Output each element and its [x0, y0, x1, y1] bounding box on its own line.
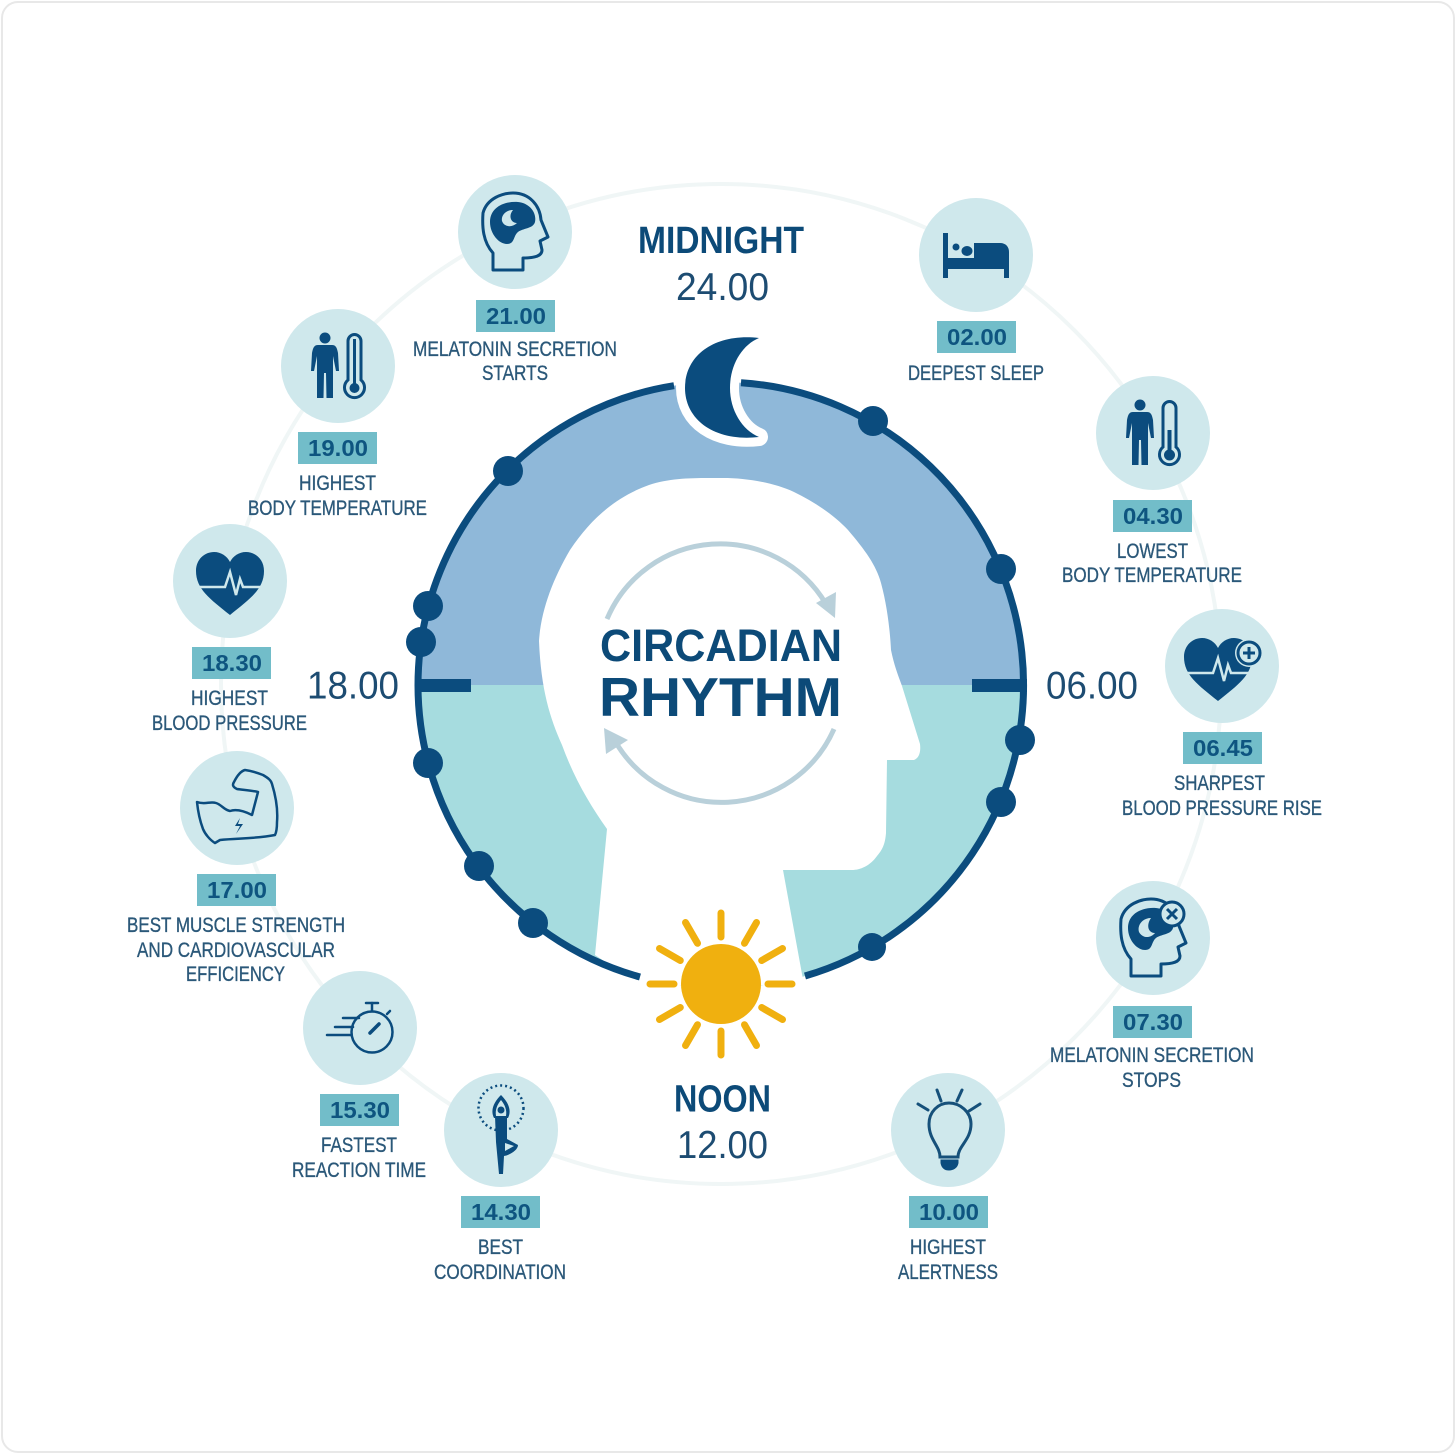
item: 18.30 highest blood pressure: BLOOD PRESSURE	[152, 712, 307, 735]
item: 04.30 lowest temperature: LOWEST	[1117, 540, 1188, 563]
icon: person and low thermometer	[1126, 400, 1180, 465]
cycle arrow: bottom	[604, 728, 834, 802]
icon: flexed arm	[197, 770, 277, 843]
item: 07.30 melatonin stops	[1050, 881, 1254, 1092]
item: 17.00 muscle strength: 17.00	[207, 877, 267, 903]
18.00 tick	[416, 679, 471, 692]
label: 18.00: 18.00	[307, 664, 399, 708]
item: 17.00 muscle strength: BEST MUSCLE STRENGTH	[127, 914, 345, 937]
item: 02.00 deepest sleep	[908, 198, 1044, 385]
title: circadian rhythm: CIRCADIAN	[600, 620, 842, 671]
item: 19.00 highest temperature: 19.00	[308, 435, 368, 461]
title: circadian rhythm	[599, 620, 842, 728]
heading: midnight: MIDNIGHT	[638, 220, 804, 262]
item: 19.00 highest temperature: BODY TEMPERATURE	[248, 497, 427, 520]
heading: midnight	[638, 220, 804, 309]
item: 17.00 muscle strength	[127, 751, 345, 986]
item: 06.45 sharpest blood pressure rise: BLOOD PRESSURE RISE	[1122, 797, 1322, 820]
item: 10.00 alertness: 10.00	[919, 1199, 979, 1225]
ring outline	[418, 383, 1024, 977]
central clock dial	[406, 375, 1035, 995]
icon: stopwatch	[327, 1003, 392, 1052]
item: 07.30 melatonin stops: MELATONIN SECRETION	[1050, 1044, 1254, 1067]
event dots on ring	[406, 406, 1035, 961]
cycle arrow: top	[607, 544, 836, 619]
item: 10.00 alertness: HIGHEST	[910, 1236, 986, 1259]
item: 21.00 melatonin starts: MELATONIN SECRETION	[413, 338, 617, 361]
night half of dial	[410, 375, 1032, 685]
item: 18.30 highest blood pressure: 18.30	[202, 650, 262, 676]
icon: sun	[650, 913, 792, 1055]
item: 19.00 highest temperature: HIGHEST	[299, 472, 376, 495]
icon: person and full thermometer	[311, 332, 364, 398]
item: 02.00 deepest sleep: DEEPEST SLEEP	[908, 362, 1044, 385]
item: 15.30 reaction time: 15.30	[330, 1097, 390, 1123]
item: 04.30 lowest temperature: 04.30	[1123, 503, 1183, 529]
icon: yoga tree pose	[478, 1086, 524, 1174]
item: 17.00 muscle strength: AND CARDIOVASCULAR	[137, 939, 335, 962]
item: 19.00 highest temperature	[248, 309, 427, 520]
item: 15.30 reaction time: REACTION TIME	[292, 1159, 426, 1182]
item: 10.00 alertness	[891, 1073, 1005, 1284]
heading: noon	[674, 1078, 771, 1167]
item: 07.30 melatonin stops: STOPS	[1122, 1069, 1181, 1092]
item: 07.30 melatonin stops: 07.30	[1123, 1009, 1183, 1035]
item: 21.00 melatonin starts: 21.00	[486, 303, 546, 329]
heading: noon: 12.00	[677, 1124, 768, 1167]
item: 06.45 sharpest blood pressure rise: 06.45	[1193, 735, 1253, 761]
icon: heart with plus	[1184, 638, 1263, 701]
title: circadian rhythm: RHYTHM	[599, 666, 842, 728]
item: 21.00 melatonin starts	[413, 175, 617, 385]
item: 14.30 coordination: 14.30	[471, 1199, 531, 1225]
head silhouette	[539, 478, 920, 985]
item: 14.30 coordination: BEST	[478, 1236, 523, 1259]
item: 06.45 sharpest blood pressure rise	[1122, 609, 1322, 820]
icon: head with moon brain	[483, 193, 548, 270]
item: 21.00 melatonin starts: STARTS	[482, 362, 548, 385]
item: 15.30 reaction time: FASTEST	[321, 1134, 397, 1157]
item: 14.30 coordination: COORDINATION	[434, 1261, 566, 1284]
item: 18.30 highest blood pressure	[152, 524, 307, 735]
icon: heart with pulse	[196, 552, 264, 615]
item: 04.30 lowest temperature: BODY TEMPERATURE	[1062, 564, 1242, 587]
item: 17.00 muscle strength: EFFICIENCY	[186, 963, 285, 986]
item: 04.30 lowest temperature	[1062, 376, 1242, 587]
item: 15.30 reaction time	[292, 971, 426, 1182]
icon: light bulb	[918, 1090, 980, 1170]
icon: bed	[943, 233, 1009, 278]
item: 18.30 highest blood pressure: HIGHEST	[191, 687, 268, 710]
item: 06.45 sharpest blood pressure rise: SHARPEST	[1174, 772, 1265, 795]
06.00 tick	[972, 679, 1027, 692]
day half of dial	[410, 685, 1032, 995]
icon: moon	[685, 337, 759, 438]
icon: head with crossed moon	[1121, 899, 1186, 976]
item: 02.00 deepest sleep: 02.00	[947, 324, 1007, 350]
item: 10.00 alertness: ALERTNESS	[898, 1261, 998, 1284]
heading: noon: NOON	[674, 1078, 771, 1120]
label: 06.00: 06.00	[1046, 664, 1138, 708]
heading: midnight: 24.00	[676, 266, 769, 309]
item: 14.30 coordination	[434, 1073, 566, 1284]
